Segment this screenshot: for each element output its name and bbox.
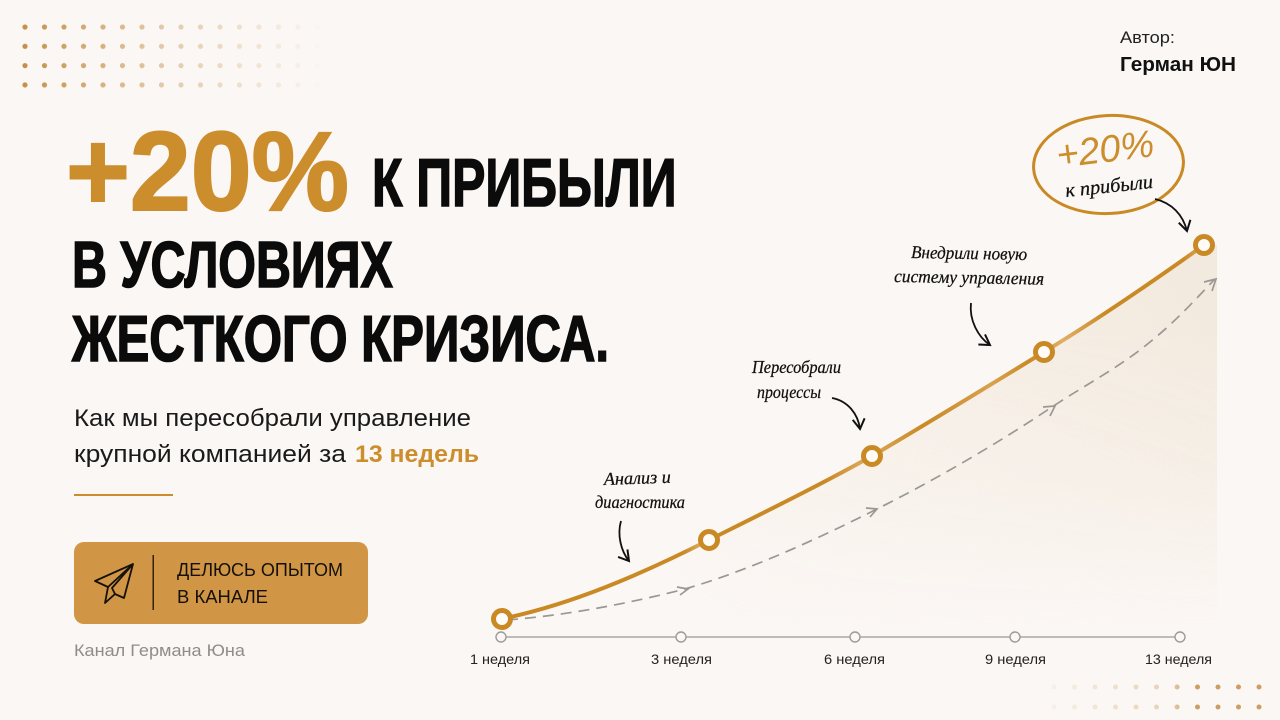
callout: +20% to profit: к прибыли	[1064, 171, 1154, 202]
channel caption: Канал Германа Юна	[74, 641, 246, 660]
decorative dot grid: bottom right	[1052, 684, 1262, 710]
note: new management system: систему управления	[894, 266, 1044, 289]
area under growth curve	[831, 245, 1217, 534]
note: analysis and diagnostics: диагностика	[595, 492, 685, 512]
note: new management system: Внедрили новую	[911, 242, 1028, 264]
time axis: 1 неделя	[470, 651, 530, 667]
author block: Автор:	[1120, 28, 1175, 47]
call-to-action button: ДЕЛЮСЬ ОПЫТОМ	[177, 560, 343, 580]
growth curve	[501, 245, 1204, 619]
title: ЖЕСТКОГО КРИЗИСА.	[72, 302, 609, 374]
time axis: 13 неделя	[1145, 651, 1212, 667]
author block	[1120, 28, 1236, 76]
title: К ПРИБЫЛИ	[372, 145, 677, 221]
callout: +20% to profit	[1031, 112, 1187, 231]
call-to-action button	[74, 542, 368, 624]
note: analysis and diagnostics	[595, 467, 685, 561]
baseline projection: dashed arrow line	[507, 279, 1216, 620]
time axis: 3 неделя	[651, 651, 712, 667]
note: analysis and diagnostics: Анализ и	[602, 467, 671, 489]
author block: Герман ЮН	[1120, 54, 1236, 76]
note: new management system	[894, 242, 1044, 345]
call-to-action button: В КАНАЛЕ	[177, 587, 268, 607]
subtitle	[74, 405, 479, 468]
subtitle: 13 недель	[355, 441, 479, 468]
title: В УСЛОВИЯХ	[72, 228, 393, 300]
time axis: 9 неделя	[985, 651, 1046, 667]
title	[66, 109, 677, 374]
note: rebuilt processes: процессы	[757, 382, 821, 402]
icon: paper plane	[95, 564, 133, 603]
time axis	[470, 632, 1212, 667]
callout: +20% to profit: +20%	[1054, 123, 1156, 177]
decorative dot grid: top left	[22, 24, 300, 88]
subtitle: крупной компанией за	[74, 441, 347, 468]
curve milestones	[494, 236, 1212, 628]
time axis: 6 неделя	[824, 651, 885, 667]
subtitle: Как мы пересобрали управление	[74, 405, 471, 432]
note: rebuilt processes: Пересобрали	[751, 357, 841, 377]
note: rebuilt processes	[751, 357, 860, 429]
title: +20%	[66, 109, 349, 234]
